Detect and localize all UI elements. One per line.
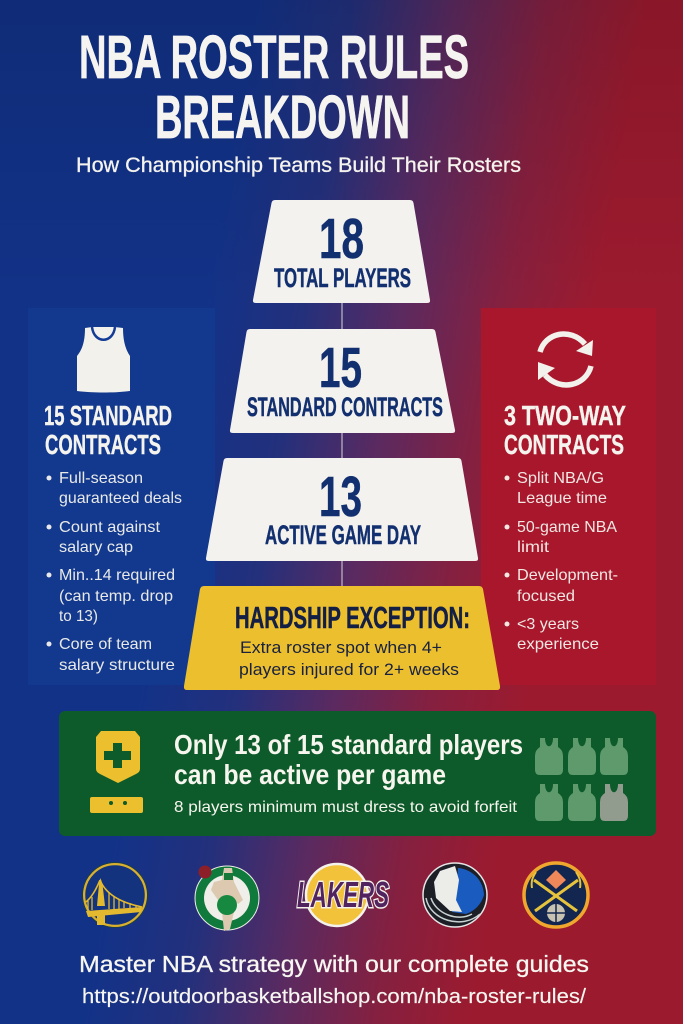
bullet list: standard contracts: Core of team <box>59 636 152 653</box>
heading: two-way contracts: CONTRACTS <box>504 429 624 460</box>
team logos row <box>82 862 588 931</box>
bullet list: standard contracts: to 13) <box>59 608 98 625</box>
panel: 15 standard contracts <box>28 308 215 685</box>
pyramid tier: hardship exception: players injured for 2+ weeks <box>239 660 459 679</box>
bullet list: standard contracts: Min..14 required <box>59 567 175 584</box>
bullet list: two-way contracts <box>504 470 618 653</box>
callout text: can be active per game <box>174 759 446 790</box>
icon: medical shield <box>96 731 140 783</box>
pyramid tier: hardship exception: HARDSHIP EXCEPTION: <box>235 600 470 635</box>
bullet list: two-way contracts: <3 years <box>517 616 579 633</box>
pyramid tier: 13 active game day: ACTIVE GAME DAY <box>265 520 421 550</box>
pyramid tier: 13 active game day: 13 <box>319 465 362 529</box>
icon: jersey grid <box>535 738 628 821</box>
pyramid tier: 13 active game day <box>206 458 478 561</box>
pyramid tier: 15 standard contracts: 15 <box>319 336 362 400</box>
pyramid tier: hardship exception <box>184 586 500 690</box>
logo: Dallas Mavericks <box>423 863 487 927</box>
bullet list: two-way contracts: League time <box>517 490 607 507</box>
icon: white jersey <box>77 327 130 392</box>
icon: yellow bar with dots <box>90 797 143 813</box>
panel: active players callout <box>59 711 656 836</box>
bullet list: two-way contracts: limit <box>517 539 550 556</box>
bullet list: standard contracts <box>46 470 182 674</box>
subtitle: How Championship Teams Build Their Rosters <box>76 154 521 177</box>
footer call to action: Master NBA strategy with our complete guides <box>79 951 589 977</box>
bullet list: standard contracts: Count against <box>59 519 161 536</box>
logo: Los Angeles Lakers <box>297 864 389 926</box>
footer url: https://outdoorbasketballshop.com/nba-roster-rules/ <box>82 986 586 1008</box>
callout text: 8 players minimum must dress to avoid forfeit <box>174 799 518 816</box>
bullet list: standard contracts: (can temp. drop <box>59 588 173 605</box>
pyramid tier: 18 total players: 18 <box>319 207 364 271</box>
bullet list: standard contracts: salary cap <box>59 539 133 556</box>
bullet list: two-way contracts: 50-game NBA <box>517 519 617 536</box>
heading: 15 standard contracts: CONTRACTS <box>45 429 161 460</box>
logo: Los Angeles Lakers: LAKERS <box>297 874 389 915</box>
pyramid tier: 15 standard contracts: STANDARD CONTRACTS <box>247 392 443 422</box>
bullet list: standard contracts: Full-season <box>59 470 143 487</box>
callout text: Only 13 of 15 standard players <box>174 729 523 760</box>
bullet list: two-way contracts: experience <box>517 636 599 653</box>
bullet list: two-way contracts: Split NBA/G <box>517 470 604 487</box>
heading: 15 standard contracts: 15 STANDARD <box>44 400 172 431</box>
heading: 15 standard contracts <box>44 400 172 460</box>
logo: Boston Celtics <box>195 866 259 931</box>
panel: 3 two-way contracts <box>481 308 656 685</box>
callout text <box>174 729 523 816</box>
bullet list: standard contracts: salary structure <box>59 657 175 674</box>
bullet list: two-way contracts: focused <box>517 588 575 605</box>
pyramid tier: 18 total players: TOTAL PLAYERS <box>274 263 411 293</box>
title: BREAKDOWN <box>155 83 410 151</box>
logo: Golden State Warriors <box>82 862 148 928</box>
pyramid tier: 15 standard contracts <box>230 329 455 433</box>
title <box>79 23 469 151</box>
icon: two-way arrows <box>538 334 593 385</box>
heading: two-way contracts: 3 TWO-WAY <box>504 400 626 431</box>
heading: two-way contracts <box>504 400 626 460</box>
bullet list: standard contracts: guaranteed deals <box>59 490 182 507</box>
pyramid tier: hardship exception: Extra roster spot when 4+ <box>240 638 442 657</box>
pyramid tier: 18 total players <box>253 200 430 303</box>
pyramid connector line <box>341 300 343 590</box>
logo: Denver Nuggets <box>524 863 588 927</box>
bullet list: two-way contracts: Development- <box>517 567 618 584</box>
